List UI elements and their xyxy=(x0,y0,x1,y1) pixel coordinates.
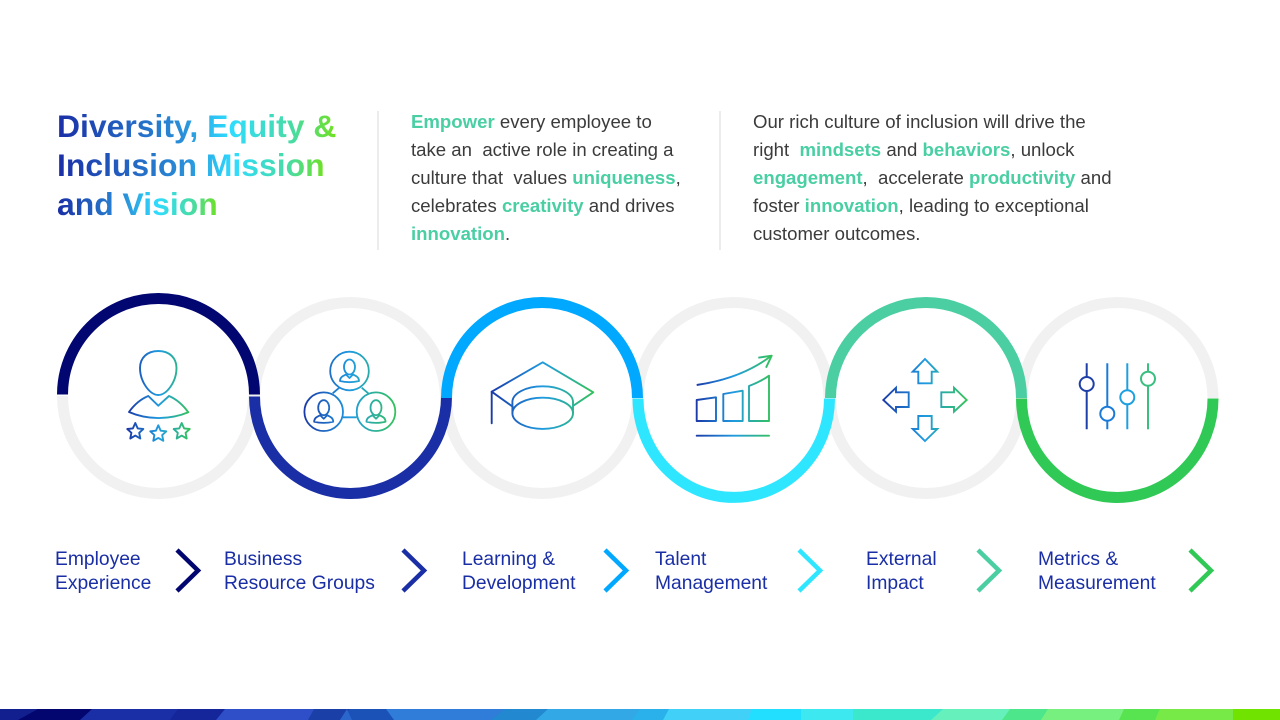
arc: talent management xyxy=(638,398,830,497)
label: talent management xyxy=(655,549,768,594)
chevron 4 xyxy=(799,550,820,591)
vision text xyxy=(753,111,1112,244)
label: business resource groups: Business xyxy=(224,548,302,570)
icon: person with stars xyxy=(127,351,190,441)
label: employee experience xyxy=(55,548,151,594)
arc: employee experience xyxy=(62,298,254,394)
footer gradient band xyxy=(0,709,1280,720)
vision text: customer outcomes. xyxy=(753,223,920,244)
mission text: innovation. xyxy=(411,223,510,244)
label: learning and development: Learning & xyxy=(462,548,555,570)
gray ring segments xyxy=(62,302,1213,494)
arc: business resource groups xyxy=(254,396,446,494)
label: learning and development: Development xyxy=(462,572,575,594)
mission text: culture that values uniqueness, xyxy=(411,167,681,188)
icon: connected people xyxy=(304,352,395,431)
icon: graduation cap xyxy=(492,362,593,429)
mission text xyxy=(411,111,681,244)
arc: learning and development xyxy=(446,302,638,398)
arc: metrics and measurement xyxy=(1022,398,1213,497)
label: business resource groups: Resource Groups xyxy=(224,572,375,594)
label: external impact xyxy=(866,549,937,594)
title: Inclusion Mission xyxy=(57,147,325,183)
mission text: take an active role in creating a xyxy=(411,139,674,160)
chevron 5 xyxy=(978,550,999,591)
arc: external impact xyxy=(830,302,1022,398)
icon: four arrows xyxy=(883,359,967,441)
label: metrics and measurement xyxy=(1038,549,1156,594)
title: Diversity, Equity & xyxy=(57,108,336,144)
label: external impact: Impact xyxy=(866,573,924,594)
chevron 2 xyxy=(403,550,424,591)
chevron 6 xyxy=(1190,550,1211,591)
label: business resource groups xyxy=(224,548,375,594)
vision text: right mindsets and behaviors, unlock xyxy=(753,139,1074,160)
label: learning and development xyxy=(462,548,576,594)
label: employee experience: Employee xyxy=(55,548,141,570)
label: talent management: Management xyxy=(655,573,767,594)
mission text: Empower every employee to xyxy=(411,111,652,132)
label: employee experience: Experience xyxy=(55,572,151,594)
label: metrics and measurement: Measurement xyxy=(1038,573,1156,594)
label: external impact: External xyxy=(866,549,937,570)
vision text: engagement, accelerate productivity and xyxy=(753,167,1112,188)
vision text: Our rich culture of inclusion will drive the xyxy=(753,111,1086,132)
chevron 1 xyxy=(177,550,198,591)
label: talent management: Talent xyxy=(655,549,706,570)
vision text: foster innovation, leading to exceptional xyxy=(753,195,1089,216)
mission text: celebrates creativity and drives xyxy=(411,195,675,216)
chevron 3 xyxy=(605,550,626,591)
icon: growth chart xyxy=(697,356,772,436)
label: metrics and measurement: Metrics & xyxy=(1038,549,1118,570)
title xyxy=(57,108,336,222)
icon: sliders xyxy=(1080,363,1155,429)
title: and Vision xyxy=(57,186,218,222)
